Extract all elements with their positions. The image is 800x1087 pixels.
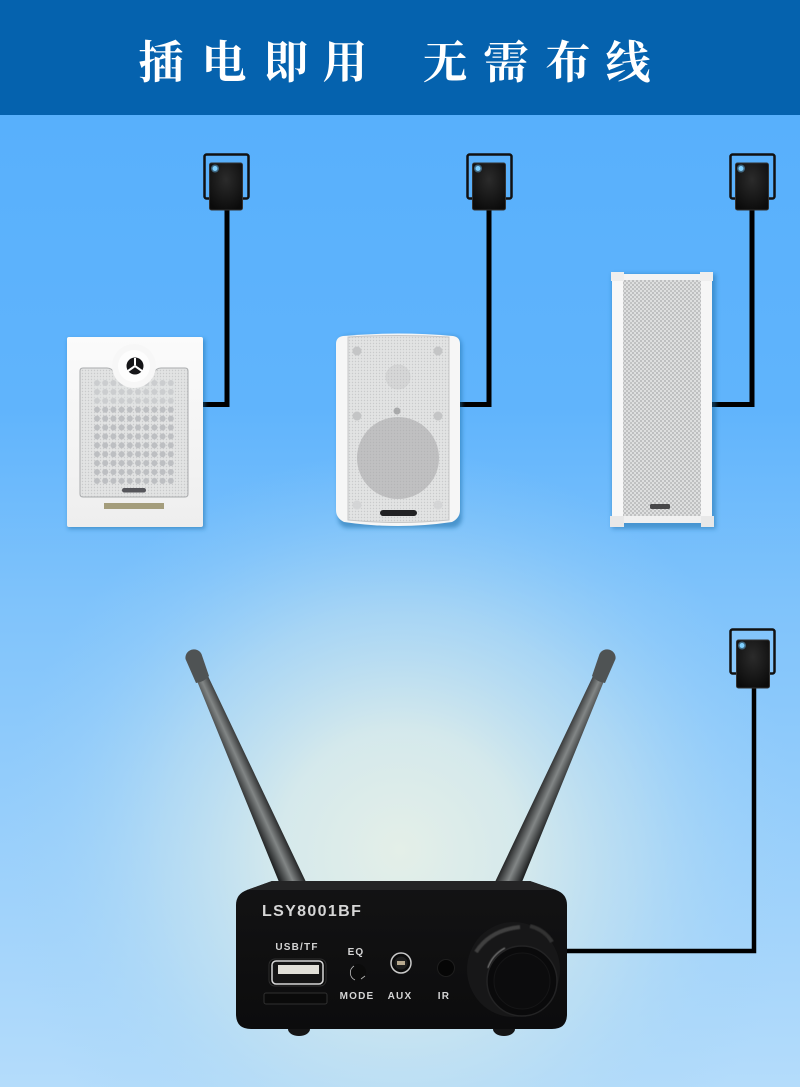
speaker: column speaker bbox=[610, 272, 716, 529]
volume knob bbox=[467, 922, 560, 1017]
amplifier with antennas bbox=[185, 649, 616, 1036]
label: AUX: AUX bbox=[388, 991, 412, 1002]
label: IR: IR bbox=[438, 991, 450, 1002]
icon: power adapter 4 bbox=[730, 630, 774, 688]
title: 电 bbox=[201, 26, 247, 91]
antenna: left bbox=[185, 649, 306, 882]
title: 布 bbox=[545, 26, 591, 91]
label: MODE: MODE bbox=[340, 991, 374, 1002]
title: 无 bbox=[422, 26, 468, 91]
icon: power adapter 3 bbox=[730, 154, 774, 210]
title: 即 bbox=[263, 26, 309, 91]
TF card slot bbox=[264, 993, 327, 1004]
title bbox=[138, 26, 651, 91]
amplifier feet bbox=[288, 1022, 515, 1036]
icon: power adapter 2 bbox=[468, 154, 512, 210]
speaker: two-way wall speaker bbox=[336, 334, 462, 528]
IR sensor bbox=[438, 960, 454, 976]
title: 用 bbox=[322, 26, 368, 91]
title: 需 bbox=[483, 26, 529, 91]
title: 插 bbox=[138, 26, 184, 91]
speaker: square wall speaker bbox=[67, 337, 205, 529]
cable: amplifier bbox=[566, 685, 754, 951]
AUX jack bbox=[391, 953, 411, 973]
label: USB/TF: USB/TF bbox=[275, 942, 319, 953]
USB port bbox=[269, 959, 326, 986]
antenna: right bbox=[495, 649, 616, 882]
cable: speaker 3 bbox=[712, 205, 752, 404]
cable: speaker 2 bbox=[458, 205, 489, 404]
mode button bbox=[350, 964, 366, 980]
amplifier body bbox=[236, 881, 567, 1029]
model name: LSY8001BF bbox=[262, 903, 362, 920]
title: 线 bbox=[605, 26, 651, 91]
label: EQ: EQ bbox=[348, 947, 364, 958]
icon: power adapter 1 bbox=[204, 154, 248, 210]
cable: speaker 1 bbox=[203, 205, 227, 404]
title banner bbox=[0, 0, 800, 115]
